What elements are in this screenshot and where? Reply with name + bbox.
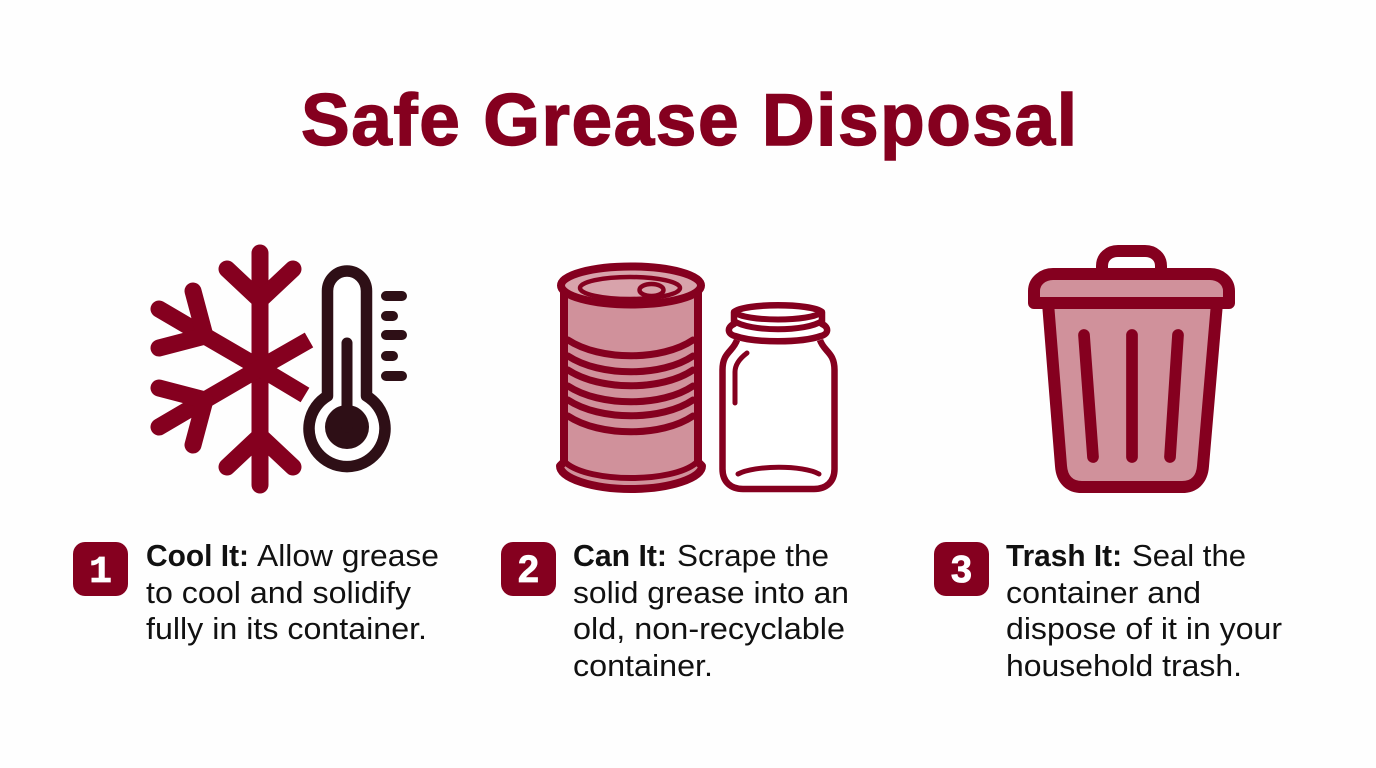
panel: step 2 can it: [501, 266, 849, 683]
step 2 text: solid grease into an: [573, 576, 849, 610]
step 2 text: old, non-recyclable: [573, 612, 845, 646]
step 2 text: [573, 539, 849, 683]
icon: snowflake: [159, 253, 309, 485]
step 3 text: dispose of it in your: [1006, 612, 1282, 646]
step number badge 1: 1: [89, 551, 112, 594]
step 1 text: to cool and solidify: [146, 576, 412, 610]
step number badge 3: [934, 542, 989, 596]
step 2 text: container.: [573, 649, 713, 683]
step 3 text: Seal the: [1132, 539, 1246, 573]
icon: glass jar: [722, 305, 834, 489]
icon: tin can: [560, 266, 702, 489]
step 2 text: Scrape the: [677, 539, 829, 573]
step 3 text: container and: [1006, 576, 1201, 610]
step 3 text: [1006, 539, 1282, 683]
step 1 text: fully in its container.: [146, 612, 427, 646]
step number badge 3: 3: [951, 549, 972, 591]
icon: trash can: [1034, 251, 1229, 487]
title: Safe Grease Disposal: [301, 80, 1077, 161]
step 3 text: Trash It:: [1006, 539, 1122, 573]
step 1 text: [146, 539, 439, 646]
step number badge 2: 2: [518, 549, 539, 591]
icon: thermometer: [309, 271, 402, 467]
step number badge 2: [501, 542, 556, 596]
panel: step 3 trash it: [934, 251, 1282, 683]
step 1 text: Cool It:: [146, 539, 249, 573]
panel: step 1 cool it: [73, 253, 439, 646]
step number badge 1: [73, 542, 128, 596]
step 3 text: household trash.: [1006, 649, 1242, 683]
step 2 text: Can It:: [573, 539, 667, 573]
step 1 text: Allow grease: [257, 539, 439, 573]
